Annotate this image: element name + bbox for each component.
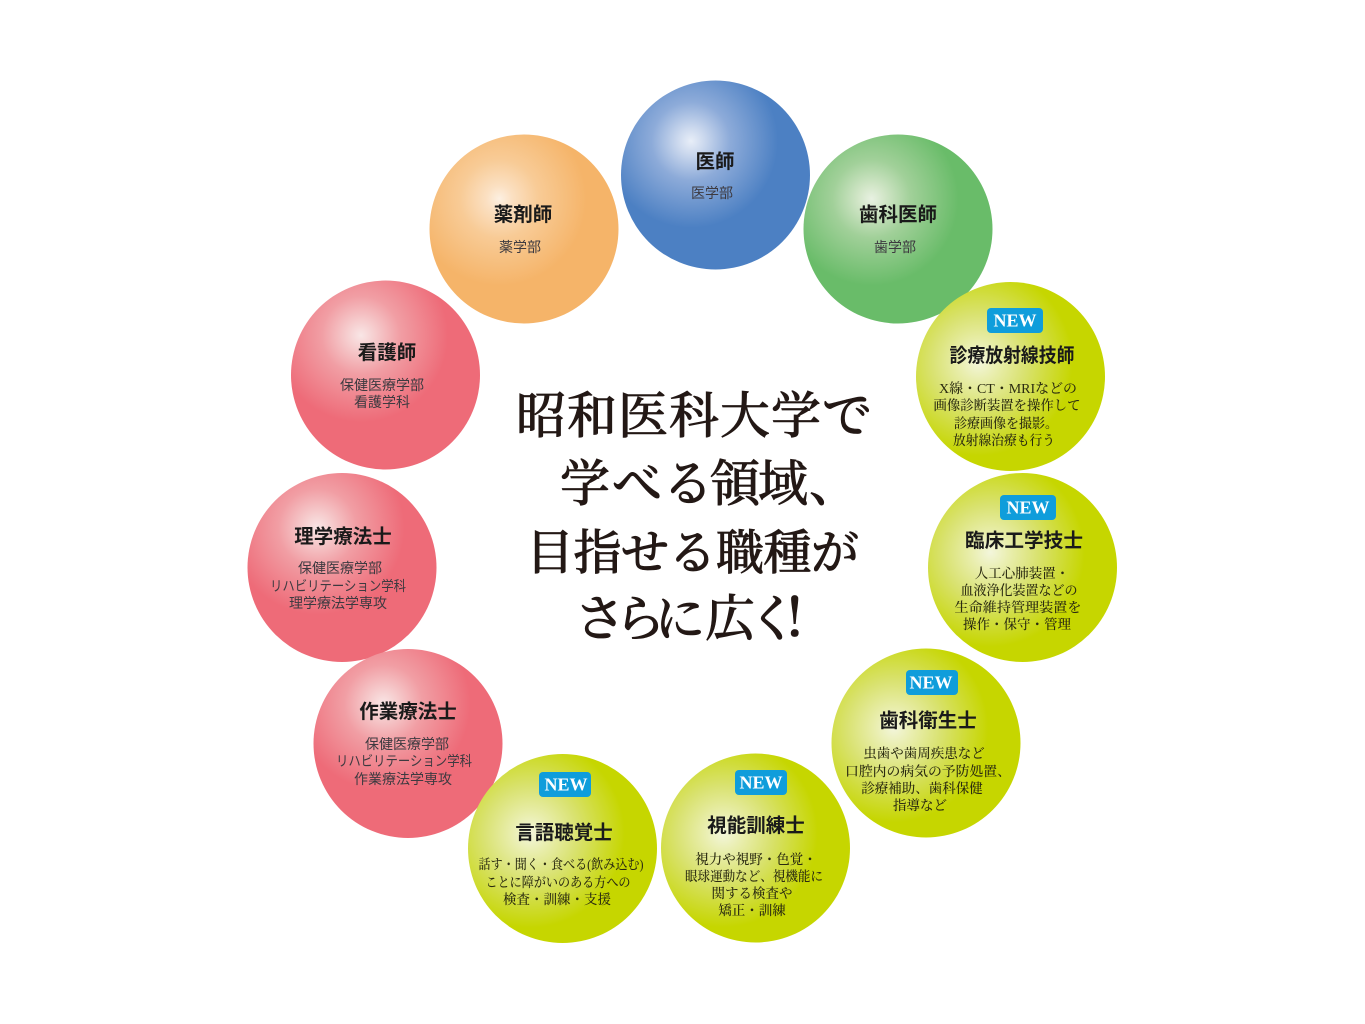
circle: 看護師: 看護師: [358, 342, 416, 364]
circle: 臨床工学技士: 操作・保守・管理: [963, 616, 1071, 632]
heading: central title: !: [786, 575, 803, 652]
badge: NEW: NEW: [739, 772, 783, 792]
circle: 歯科衛生士: 診療補助、歯科保健: [861, 780, 983, 796]
circle: 歯科医師: 歯学部: [874, 239, 916, 255]
circle: 視能訓練士: 視力や視野・色覚・: [695, 851, 817, 867]
circle: 診療放射線技師: 放射線治療も行う: [953, 432, 1055, 448]
circle: 看護師: [291, 280, 480, 470]
circle: 言語聴覚士: ことに障がいのある方への: [486, 874, 630, 890]
circle: 理学療法士: 理学療法学専攻: [289, 595, 387, 611]
circle: 診療放射線技師: X線・CT・MRIなどの: [939, 381, 1077, 396]
circle: 看護師: 看護学科: [354, 394, 410, 410]
circle: 視能訓練士: 矯正・訓練: [718, 902, 786, 918]
circle: 医師: 医師: [695, 151, 735, 173]
circle: 理学療法士: [248, 473, 436, 662]
circle: 言語聴覚士: [468, 754, 657, 943]
circle: 言語聴覚士: 検査・訓練・支援: [503, 891, 611, 907]
circle: 視能訓練士: 眼球運動など、視機能に: [685, 868, 823, 884]
circle: 診療放射線技師: [916, 282, 1105, 471]
heading: central title: 目指せる職種が: [526, 514, 859, 583]
circle: 歯科衛生士: 口腔内の病気の予防処置、: [845, 763, 1011, 779]
circle: 臨床工学技士: 生命維持管理装置を: [954, 599, 1082, 615]
badge: NEW: NEW: [909, 672, 953, 692]
badge: NEW: [735, 770, 787, 795]
circle: 言語聴覚士: 話す・聞く・食べる(飲み込む): [478, 857, 644, 872]
circle: 視能訓練士: 関する検査や: [712, 885, 792, 901]
circle: 看護師: 保健医療学部: [340, 377, 424, 393]
circle: 歯科衛生士: [832, 648, 1020, 838]
heading: central title: さらに広く: [575, 579, 798, 651]
heading: central title: 昭和医科大学で: [516, 376, 873, 448]
badge: NEW: [539, 772, 591, 797]
badge: NEW: NEW: [544, 774, 588, 794]
circle: 作業療法士: リハビリテーション学科: [336, 753, 472, 769]
circle: 理学療法士: リハビリテーション学科: [270, 578, 406, 594]
circle: 臨床工学技士: 臨床工学技士: [965, 529, 1083, 552]
badge: NEW: [906, 670, 958, 695]
circle: 歯科衛生士: 歯科衛生士: [879, 710, 977, 732]
badge: NEW: NEW: [993, 310, 1037, 330]
heading: central title: 学べる領域、: [560, 444, 859, 516]
circle: 作業療法士: 作業療法士: [359, 701, 457, 723]
circle: 臨床工学技士: 血液浄化装置などの: [960, 582, 1078, 598]
circle: 歯科医師: 歯科医師: [859, 204, 937, 226]
circle: 作業療法士: 保健医療学部: [365, 736, 449, 752]
heading: central title: [516, 376, 873, 652]
circle: 臨床工学技士: 人工心肺装置・: [975, 565, 1069, 581]
badge: NEW: NEW: [1006, 498, 1050, 518]
circle: 作業療法士: 作業療法学専攻: [354, 771, 452, 787]
circle: 臨床工学技士: [928, 473, 1117, 662]
circle: 診療放射線技師: 診療放射線技師: [950, 345, 1074, 367]
circle: 視能訓練士: 視能訓練士: [707, 815, 805, 837]
badge: NEW: [1000, 495, 1056, 520]
circle: 歯科医師: [804, 134, 992, 324]
circle: 歯科衛生士: 指導など: [893, 797, 947, 813]
circle: 医師: [621, 80, 810, 270]
circle: 言語聴覚士: 言語聴覚士: [515, 822, 613, 844]
circle: 薬剤師: [430, 134, 618, 324]
circle: 理学療法士: 理学療法士: [294, 525, 392, 548]
circle: 薬剤師: 薬学部: [499, 239, 541, 255]
circle: 視能訓練士: [661, 754, 850, 942]
circle: 診療放射線技師: 診療画像を撮影。: [954, 415, 1058, 431]
circle: 薬剤師: 薬剤師: [494, 204, 552, 226]
circle: 歯科衛生士: 虫歯や歯周疾患など: [863, 745, 985, 761]
circle: 医師: 医学部: [691, 185, 733, 201]
circle: 診療放射線技師: 画像診断装置を操作して: [934, 397, 1080, 413]
circle: 理学療法士: 保健医療学部: [298, 560, 382, 576]
badge: NEW: [987, 308, 1043, 333]
circle: 作業療法士: [314, 649, 502, 838]
